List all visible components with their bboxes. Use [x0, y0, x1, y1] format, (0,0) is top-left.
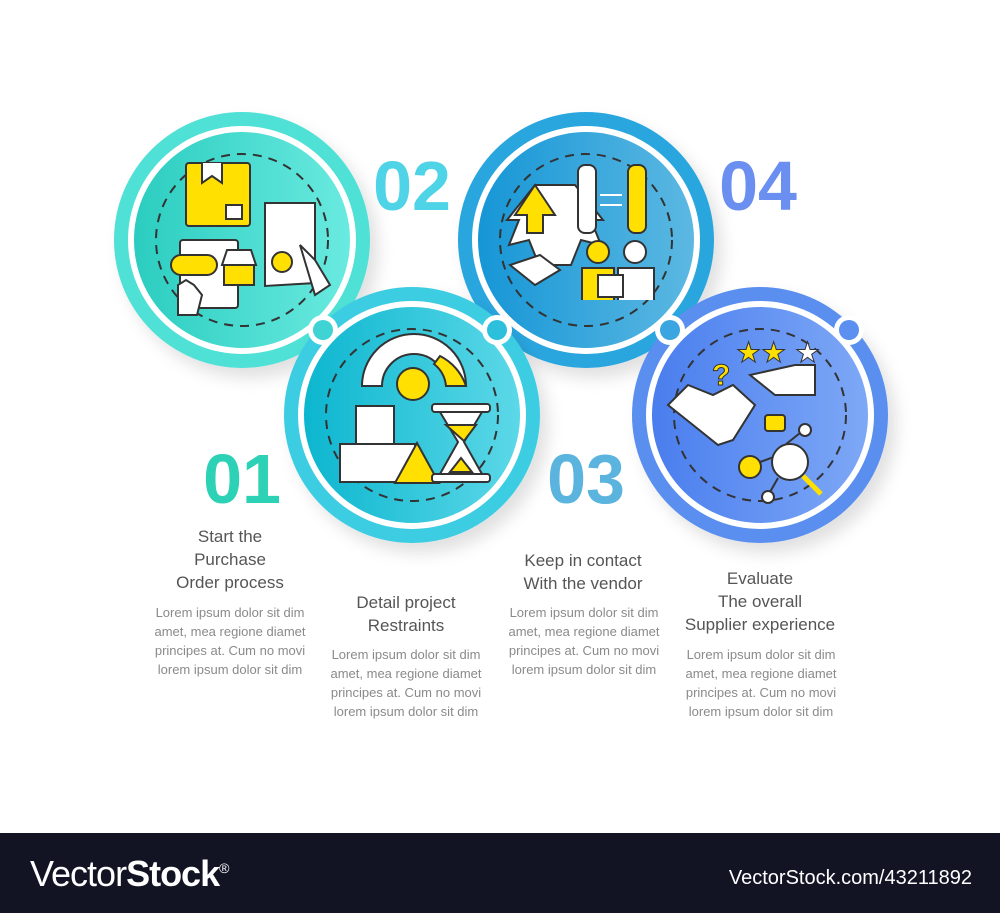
text: step 1: Order process [176, 573, 284, 592]
text: step 3: Keep in contact [524, 551, 642, 570]
text: Lorem ipsum dolor sit dim amet, mea regione diamet principes at. Cum no movi lorem ipsum dolor sit dim [154, 605, 306, 677]
footer: VectorStock.com/43211892 [729, 867, 972, 889]
icon: handshake, stars, search network: ★ [795, 337, 820, 368]
text: step 2: Detail project [356, 593, 456, 612]
numbers: 03 [547, 440, 625, 518]
text: step 1: Start the [198, 527, 262, 546]
circle 3 [458, 112, 714, 368]
footer: VectorStock® [30, 853, 228, 894]
text: Lorem ipsum dolor sit dim amet, mea regione diamet principes at. Cum no movi lorem ipsum dolor sit dim [508, 605, 660, 677]
text: step 4: Evaluate [727, 569, 793, 588]
text: step 4 [685, 569, 835, 634]
numbers: 01 [203, 440, 281, 518]
text: Lorem ipsum dolor sit dim amet, mea regione diamet principes at. Cum no movi lorem ipsum dolor sit dim [685, 647, 837, 719]
circle 2 [284, 287, 540, 543]
circle 4 [632, 287, 888, 543]
text: step 4: The overall [718, 592, 802, 611]
text: step 3 [523, 551, 643, 593]
icon: gauge, boxes, hourglass [340, 334, 490, 483]
connector dots [308, 315, 864, 345]
icon: handshake, stars, search network: ? [712, 359, 730, 392]
text: Lorem ipsum dolor sit dim amet, mea regione diamet principes at. Cum no movi lorem ipsum dolor sit dim [330, 647, 482, 719]
text: step 2: Restraints [368, 616, 444, 635]
icon: box, shop, receipt [171, 163, 330, 315]
numbers: 02 [373, 147, 451, 225]
text: step 1: Purchase [194, 550, 266, 569]
numbers [203, 147, 797, 518]
numbers: 04 [719, 147, 797, 225]
text: step 3: With the vendor [523, 574, 643, 593]
icon: handshake, stars, search network [668, 337, 821, 503]
text: step 2 [356, 593, 456, 635]
circle 1 [114, 112, 370, 368]
text: step 4: Supplier experience [685, 615, 835, 634]
text: step 1 [176, 527, 284, 592]
icon: handshake, stars, search network: ★★ [736, 337, 786, 368]
footer [0, 833, 1000, 913]
icon: handshake, phones, people [507, 165, 654, 300]
